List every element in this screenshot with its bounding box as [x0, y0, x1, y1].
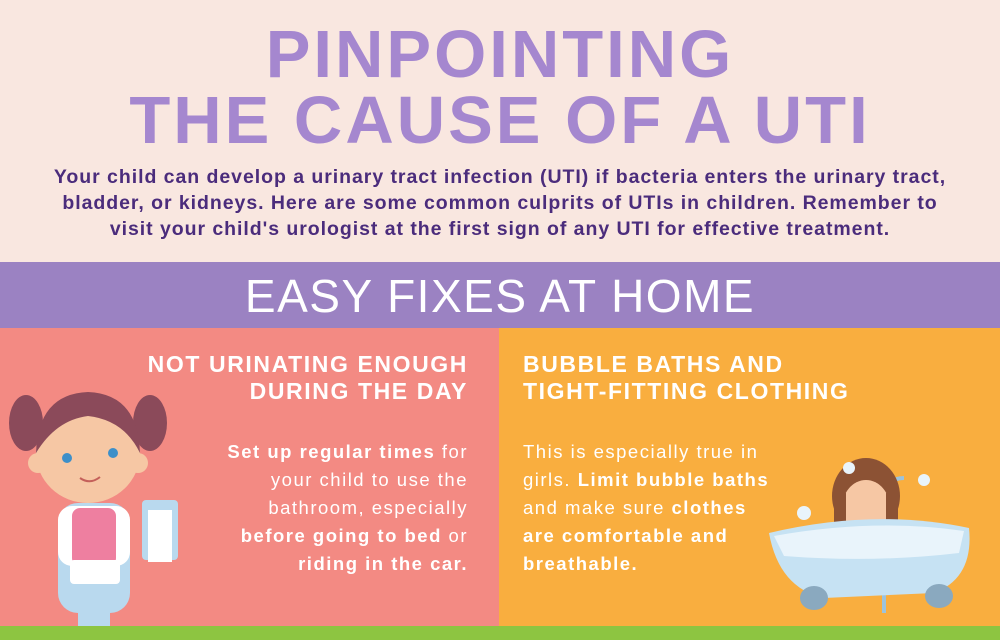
title: THE CAUSE OF A UTI	[129, 83, 871, 158]
heading: bubble baths: TIGHT-FITTING CLOTHING	[523, 378, 850, 404]
subtitle text: visit your child's urologist at the first sign of any UTI for effective treatment.	[110, 218, 890, 240]
body text: left: your child to use the	[271, 469, 468, 490]
body text: right: and make sure clothes	[523, 497, 747, 518]
subtitle text	[54, 166, 946, 240]
title: PINPOINTING	[266, 17, 734, 92]
heading: not urinating: DURING THE DAY	[250, 378, 468, 404]
subtitle text: bladder, or kidneys. Here are some common culprits of UTIs in children. Remember to	[62, 192, 938, 214]
body text: left: before going to bed or	[241, 525, 468, 546]
panel: bubble baths	[499, 328, 1000, 626]
section banner: EASY FIXES AT HOME	[245, 270, 755, 322]
body text: right: This is especially true in	[523, 441, 758, 462]
heading: bubble baths	[523, 351, 850, 404]
panel: not urinating enough	[0, 328, 499, 626]
heading: bubble baths: BUBBLE BATHS AND	[523, 351, 784, 377]
body text: left: bathroom, especially	[268, 497, 468, 518]
title	[129, 17, 871, 158]
illustration: girl in bathtub	[769, 458, 970, 613]
body text: right: are comfortable and	[523, 525, 728, 546]
illustration: girl on toilet	[9, 392, 178, 626]
heading: not urinating	[148, 351, 468, 404]
body text: right: girls. Limit bubble baths	[523, 469, 769, 490]
body text: left: Set up regular times for	[227, 441, 468, 462]
body text: right	[523, 441, 769, 574]
body text: left: riding in the car.	[298, 553, 468, 574]
subtitle text: Your child can develop a urinary tract infection (UTI) if bacteria enters the urinary tract,	[54, 166, 946, 188]
body text: left	[227, 441, 468, 574]
section banner	[0, 262, 1000, 328]
body text: right: breathable.	[523, 553, 638, 574]
heading: not urinating: NOT URINATING ENOUGH	[148, 351, 468, 377]
